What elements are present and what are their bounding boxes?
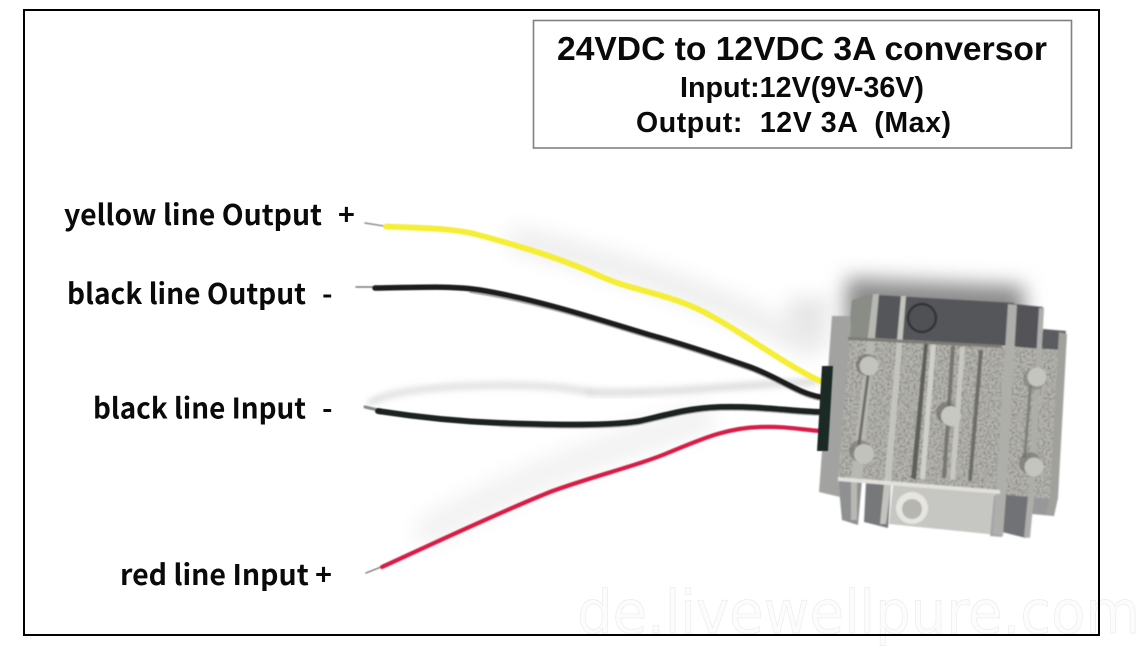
bottom mounting tab xyxy=(889,484,1002,535)
upper dark recess with mounting hole xyxy=(874,295,1014,346)
textured top surface xyxy=(836,337,1062,499)
mounting hole: bottom xyxy=(896,492,928,524)
wire: black input xyxy=(365,407,820,428)
wire connector block xyxy=(817,366,833,451)
label: black line output: - xyxy=(322,272,333,313)
wire: black output xyxy=(356,287,820,400)
input specification: Input:12V(9V-36V) xyxy=(680,72,924,104)
label: black line input: - xyxy=(322,386,333,428)
wire shadows xyxy=(370,240,830,530)
wire: yellow output xyxy=(365,223,820,381)
horizontal edge highlights xyxy=(848,337,1002,348)
left end plate xyxy=(819,316,851,497)
title: 24VDC to 12VDC 3A conversor xyxy=(557,31,1047,68)
mounting hole: top xyxy=(908,304,936,332)
label: red line input: red line Input + xyxy=(120,553,332,594)
label: black line output: black line Output xyxy=(67,272,306,313)
label: yellow line output: + xyxy=(338,193,355,234)
label: black line input: black line Input xyxy=(93,386,306,428)
device: heat sink converter xyxy=(817,278,1067,538)
mounting bosses xyxy=(849,354,1046,476)
fins: strips xyxy=(851,294,879,520)
wire: red input xyxy=(366,427,820,573)
lower dark fins xyxy=(838,478,862,525)
device drop shadow xyxy=(846,278,1024,345)
output specification: Output: 12V 3A (Max) xyxy=(636,107,951,139)
label: yellow line output: yellow line Output xyxy=(64,193,322,234)
grooves xyxy=(911,344,928,480)
title box xyxy=(534,20,1072,148)
right upper dark fins xyxy=(1011,304,1043,350)
